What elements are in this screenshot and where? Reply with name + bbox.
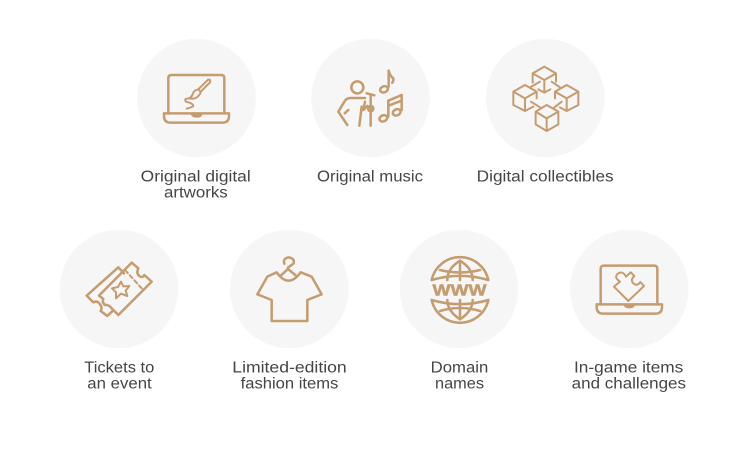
label: limited-edition fashion items [232,360,347,392]
label: tickets to an event: Tickets to [84,360,154,377]
circle background [486,39,605,157]
circle background [400,230,518,348]
icon: singer with music notes [338,71,402,126]
label: limited-edition fashion items: fashion items [241,376,339,392]
label: original music: Original music [317,168,423,186]
label: in-game items and challenges: In-game items [574,360,684,377]
icon: connected cubes [513,67,578,131]
icon: laptop with puzzle piece [597,266,662,314]
panel: digital collectibles [477,39,614,186]
circle background [311,39,430,157]
panel: domain names [400,230,518,392]
label: limited-edition fashion items: Limited-edition [232,360,347,377]
label: in-game items and challenges: and challenges [572,376,686,392]
circle background [137,39,256,157]
label: digital collectibles: Digital collectibles [477,168,614,186]
icon text: www: WWW [432,282,488,300]
icon: event tickets with star [87,263,152,316]
label: domain names [431,360,488,392]
icon: t-shirt on hanger [257,257,322,321]
icon: laptop with paintbrush [164,75,229,123]
icon: www globe [432,257,488,323]
label: original digital artworks: Original digital [141,168,251,186]
label: original digital artworks [141,168,251,202]
label: domain names: Domain [431,360,488,377]
label: original digital artworks: artworks [164,185,228,202]
circle background [60,230,178,348]
label: domain names: names [435,376,484,392]
panel: tickets to an event [60,230,178,392]
label: tickets to an event [84,360,154,392]
panel: original music [311,39,430,186]
label: tickets to an event: an event [87,376,152,392]
panel: original digital artworks [137,39,256,202]
panel: limited-edition fashion items [230,230,349,392]
circle background [570,230,689,348]
label: in-game items and challenges [572,360,686,392]
circle background [230,230,349,348]
panel: in-game items and challenges [570,230,689,392]
